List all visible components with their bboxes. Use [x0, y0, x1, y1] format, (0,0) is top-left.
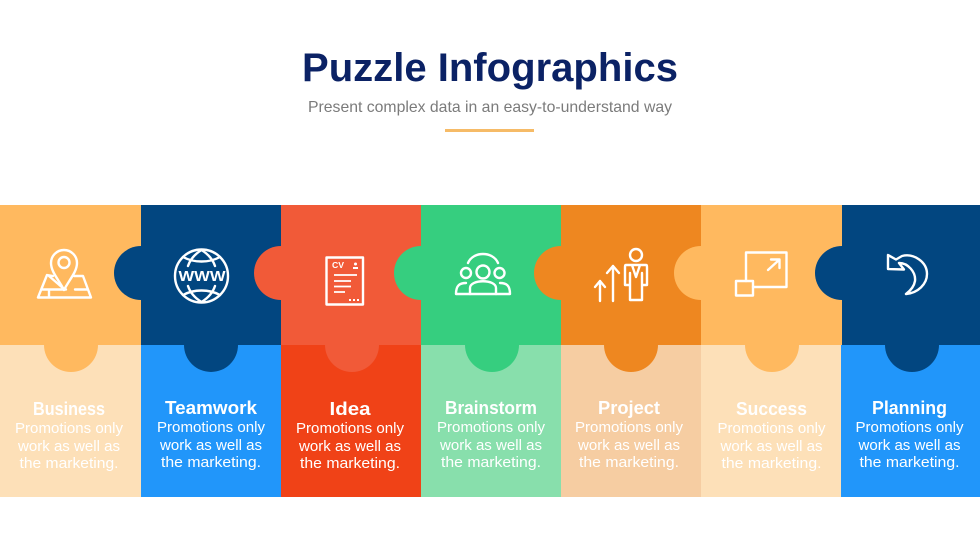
text: idea: work as well as: [298, 439, 401, 455]
icon: cv document: CV: [332, 260, 344, 270]
panel: idea: [254, 205, 421, 497]
title: Puzzle Infographics: [302, 46, 678, 90]
text: project: the marketing.: [579, 455, 679, 471]
text: idea: the marketing.: [300, 456, 400, 472]
accent underline: [445, 129, 534, 132]
text: success: work as well as: [719, 439, 822, 455]
icon: map pin: [38, 250, 91, 298]
heading: brainstorm: Brainstorm: [445, 398, 537, 418]
icon: globe www: [175, 250, 228, 302]
text: brainstorm: Promotions only: [437, 420, 546, 436]
text: brainstorm: the marketing.: [441, 455, 541, 471]
text: planning: the marketing.: [860, 455, 960, 471]
text: business: the marketing.: [20, 456, 118, 472]
text: success: Promotions only: [718, 421, 826, 437]
icon: person and growth arrows: [595, 249, 647, 301]
heading: project: Project: [598, 398, 660, 418]
heading: planning: Planning: [872, 398, 947, 418]
text: teamwork: Promotions only: [157, 420, 266, 436]
text: business: work as well as: [17, 439, 120, 455]
text: teamwork: the marketing.: [161, 455, 261, 471]
heading: idea: Idea: [330, 399, 372, 419]
heading: success: Success: [736, 399, 807, 419]
text: brainstorm: work as well as: [439, 438, 542, 454]
panel: brainstorm: [394, 205, 561, 497]
panel: success: [674, 205, 842, 497]
icon: return arrow: [888, 255, 927, 294]
panel: teamwork: [114, 205, 281, 497]
panel: planning: [815, 205, 980, 497]
text: success: the marketing.: [722, 456, 822, 472]
heading: business: Business: [33, 399, 105, 419]
panel: business: [0, 205, 141, 497]
icon: cv document: [326, 258, 363, 304]
panel: project: [534, 205, 701, 497]
icon: globe www: WWW: [178, 269, 226, 285]
subtitle: Present complex data in an easy-to-understand way: [308, 99, 672, 116]
heading: teamwork: Teamwork: [165, 398, 258, 418]
text: planning: Promotions only: [856, 420, 964, 436]
text: planning: work as well as: [857, 438, 960, 454]
text: project: Promotions only: [575, 420, 684, 436]
text: idea: Promotions only: [296, 421, 405, 437]
icon: group of people: [456, 254, 510, 294]
text: project: work as well as: [577, 438, 680, 454]
icon: resize squares: [736, 252, 786, 296]
text: teamwork: work as well as: [159, 438, 262, 454]
text: business: Promotions only: [15, 421, 124, 437]
